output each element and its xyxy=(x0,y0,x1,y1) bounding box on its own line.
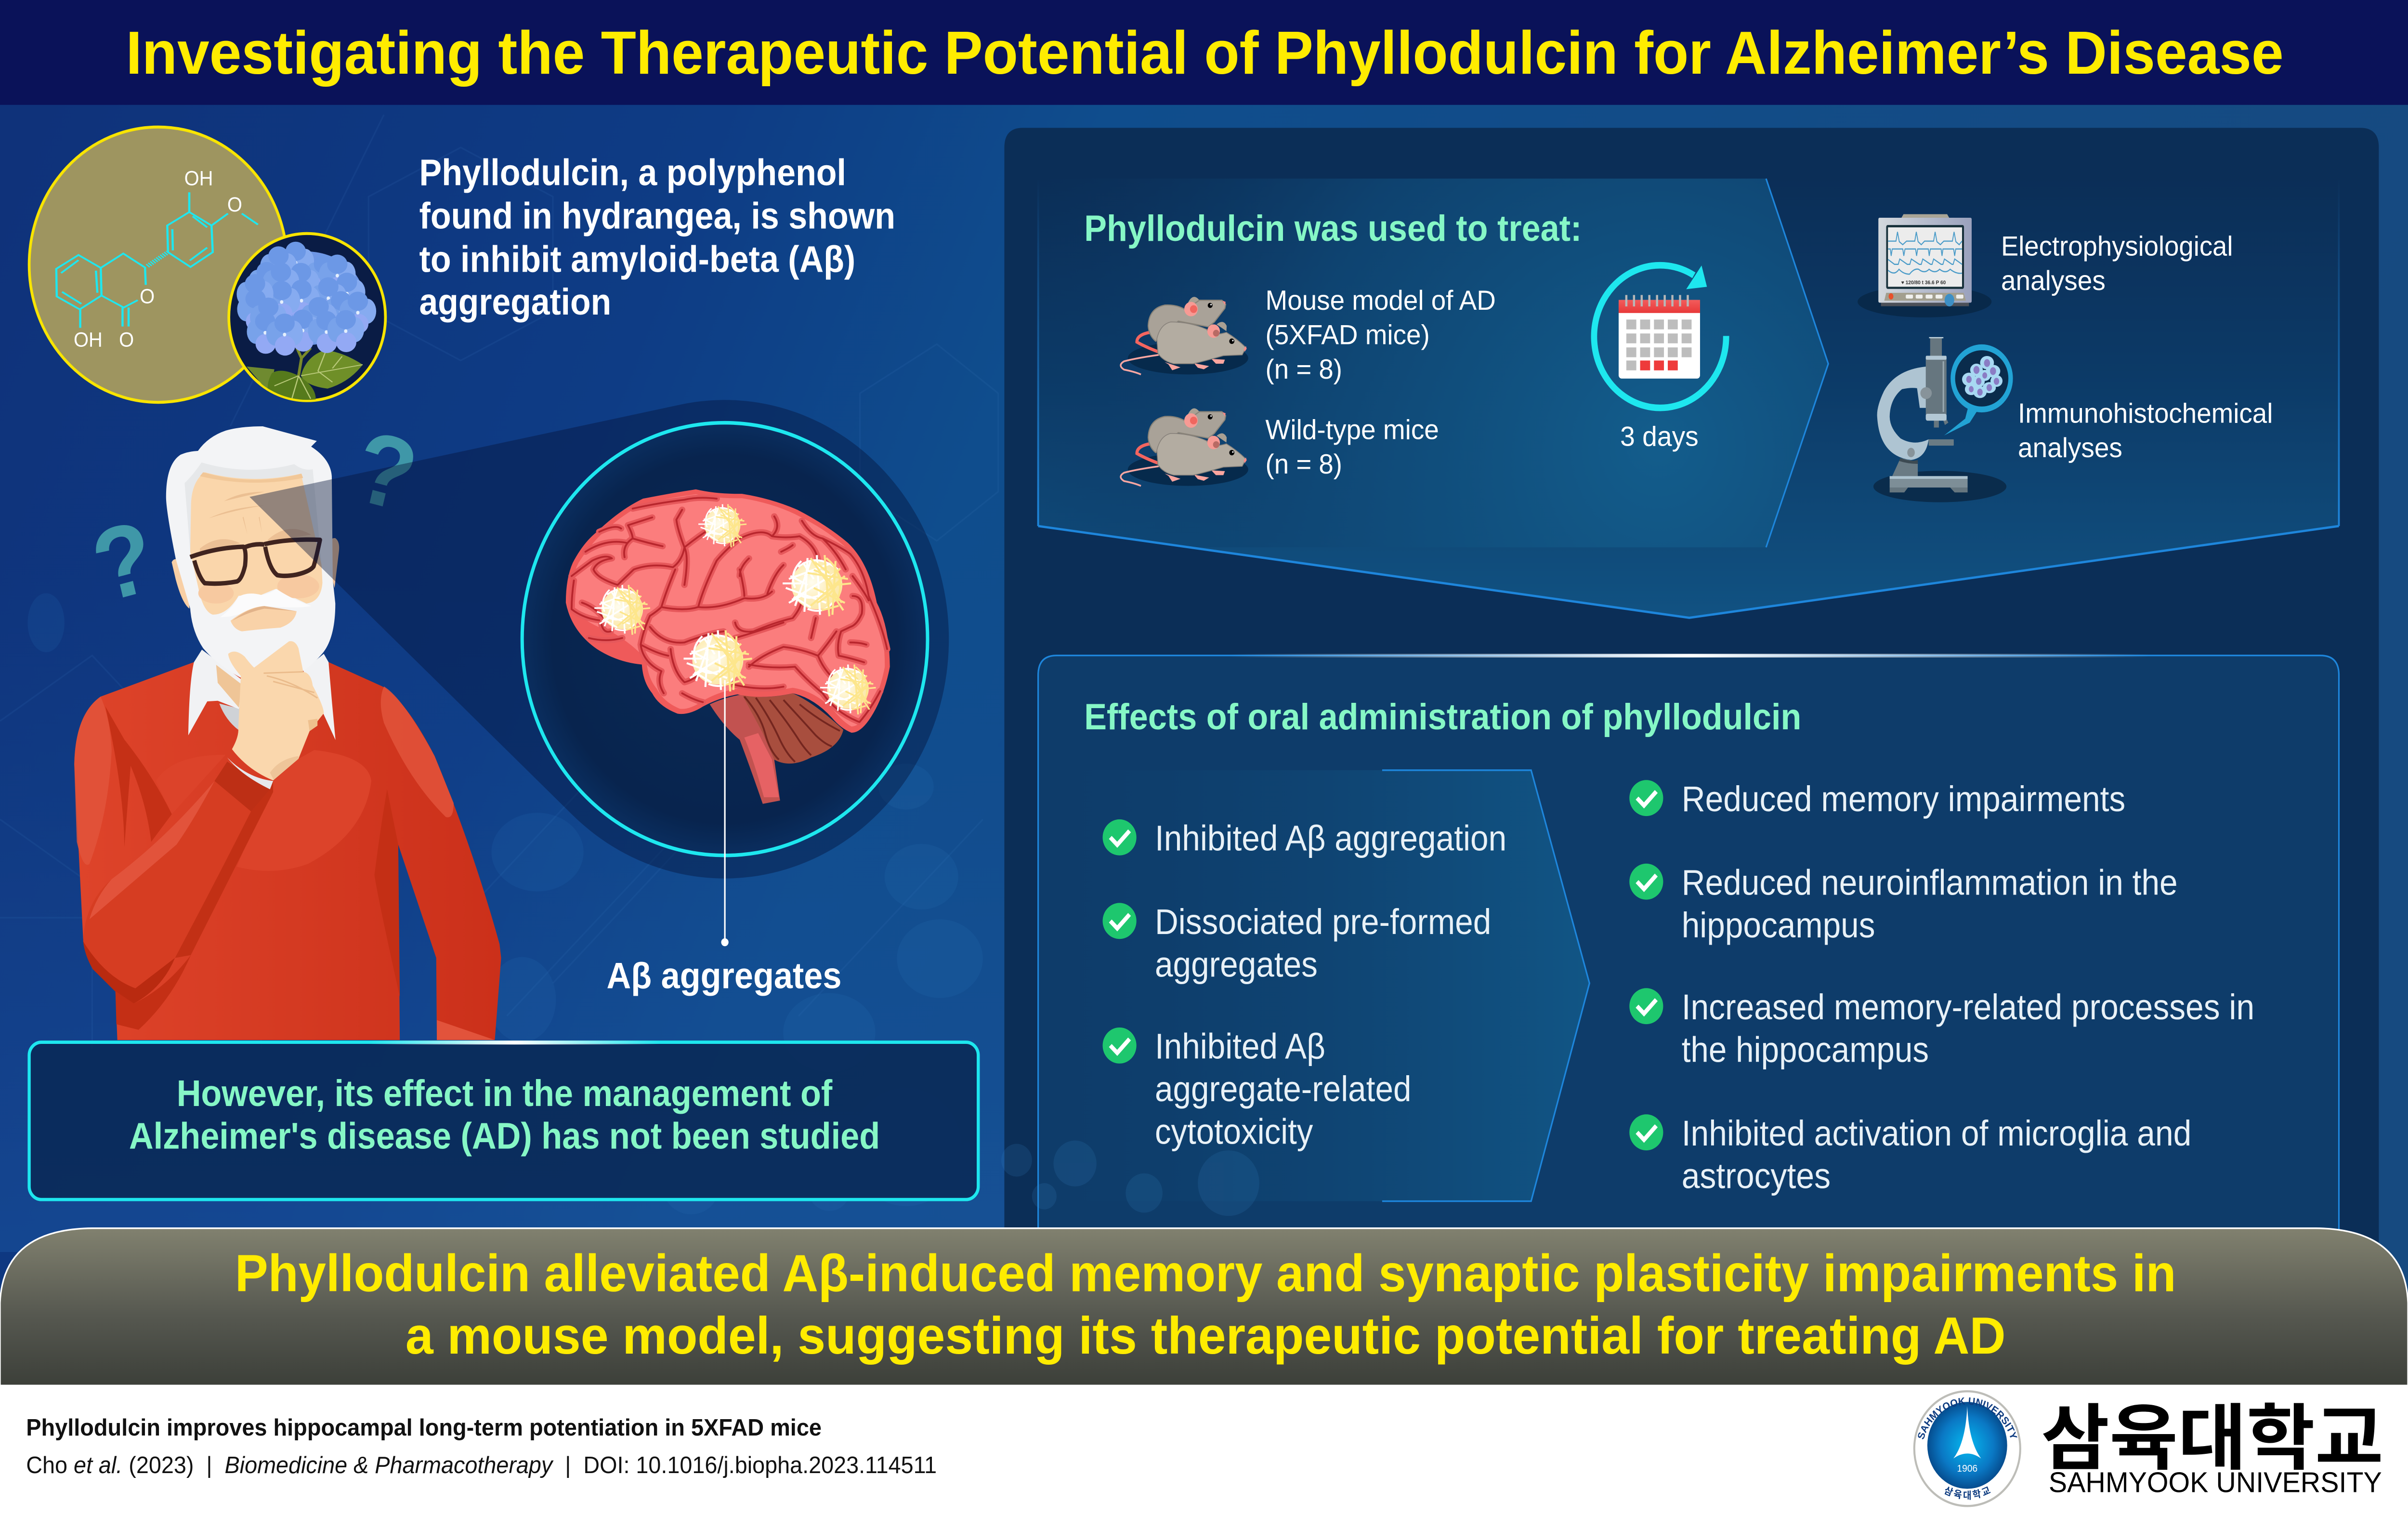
list: in vivo effects: Reduced memory impairments xyxy=(1682,779,2125,819)
head xyxy=(166,426,339,677)
plaque right xyxy=(783,555,851,616)
molecule structure xyxy=(56,192,258,328)
panel: effects xyxy=(1001,654,2339,1245)
list: in vitro effects xyxy=(1155,819,1506,1152)
effects arrow xyxy=(1038,770,1589,1201)
logo seal xyxy=(1913,1390,2021,1507)
list: in vitro effects: Inhibited Aβ xyxy=(1155,1027,1325,1067)
text: wild type: (n = 8) xyxy=(1266,448,1342,480)
flower head xyxy=(284,251,359,345)
monitor readout: ♥ 120/80 t 36.6 P 60 xyxy=(1901,280,1946,286)
cerebrum xyxy=(566,489,890,733)
university name: SAHMYOOK UNIVERSITY xyxy=(2049,1467,2382,1499)
intro text: to inhibit amyloid-beta (Aβ) xyxy=(419,238,855,280)
panel: right dark panel xyxy=(1001,128,2379,1245)
glasses xyxy=(190,540,320,584)
question mark right: ? xyxy=(345,409,427,534)
citation xyxy=(26,1415,937,1479)
logo seal: 삼육대학교 xyxy=(1945,1487,1991,1500)
sulci halo xyxy=(572,498,887,722)
callout bubble with cells xyxy=(1944,347,2011,435)
list: in vivo effects: hippocampus xyxy=(1682,906,1875,945)
list: in vitro effects: aggregates xyxy=(1155,945,1318,985)
list: in vitro effects: aggregate-related xyxy=(1155,1069,1411,1109)
text: 3 days: 3 days xyxy=(1620,421,1699,452)
icon: calendar with cycle arrow xyxy=(1594,265,1726,408)
plaque lower right xyxy=(820,665,876,714)
list: in vitro effects: Inhibited Aβ aggregation xyxy=(1155,819,1506,858)
callout: However xyxy=(29,1041,978,1199)
molecule circle xyxy=(29,127,287,402)
heading: Effects of oral administration of phyllodulcin xyxy=(1084,696,1801,737)
intro text: aggregation xyxy=(419,281,611,323)
conclusion band: Phyllodulcin alleviated Aβ-induced memory and synaptic plasticity impairments in xyxy=(235,1244,2176,1303)
list: in vitro effects: cytotoxicity xyxy=(1155,1112,1313,1152)
text: mouse model xyxy=(1266,284,1496,384)
callout: However: However, its effect in the management of xyxy=(177,1072,833,1114)
logo seal: SAHMYOOK UNIVERSITY xyxy=(1918,1397,2017,1439)
list: in vivo effects: Reduced neuroinflammation in the xyxy=(1682,863,2178,903)
plaque center xyxy=(684,630,752,691)
title bar xyxy=(0,0,2408,105)
icon: microscope xyxy=(1873,337,2011,502)
text: immunohistochemical xyxy=(2018,397,2273,463)
text: electrophysiological: analyses xyxy=(2001,265,2106,296)
cerebellum xyxy=(742,693,843,764)
citation: Cho et al. (2023) | Biomedicine & Pharmacotherapy | DOI: 10.1016/j.biopha.2023.114511 xyxy=(26,1452,937,1479)
hair and beard xyxy=(166,426,335,677)
icon: mice wild type xyxy=(1121,408,1248,486)
right ear xyxy=(328,538,339,588)
text: wild type xyxy=(1266,414,1439,480)
brain stem xyxy=(710,695,780,804)
beam xyxy=(249,400,949,879)
panel: man and brain xyxy=(74,400,949,1040)
plaque left xyxy=(594,585,650,635)
list: in vivo effects xyxy=(1682,779,2254,1196)
pointer line xyxy=(724,680,725,942)
moustache xyxy=(220,589,311,617)
citation: Phyllodulcin improves hippocampal long-term potentiation in 5XFAD mice xyxy=(26,1415,822,1441)
footer xyxy=(0,1380,2408,1515)
list: in vivo effects: astrocytes xyxy=(1682,1156,1831,1196)
bokeh cells xyxy=(1001,1141,1259,1216)
list: in vivo effects: the hippocampus xyxy=(1682,1030,1929,1070)
university name: 삼육대학교 xyxy=(2041,1380,2383,1484)
text: wild type: Wild-type mice xyxy=(1266,414,1439,445)
atom labels xyxy=(74,167,242,351)
list: in vivo effects: Inhibited activation of microglia and xyxy=(1682,1114,2191,1153)
label: Aβ aggregates: Aβ aggregates xyxy=(607,955,841,996)
text: mouse model: (n = 8) xyxy=(1266,353,1342,384)
text: immunohistochemical: Immunohistochemical xyxy=(2018,397,2273,429)
check icons xyxy=(1103,780,1663,1150)
heading: Phyllodulcin was used to treat: xyxy=(1084,208,1582,249)
leaves and stem xyxy=(296,346,311,376)
atom labels: OH xyxy=(184,167,213,190)
text: mouse model: (5XFAD mice) xyxy=(1266,319,1430,350)
sulci core xyxy=(572,498,887,722)
atom labels: O xyxy=(140,285,155,308)
list: in vitro effects: Dissociated pre-formed xyxy=(1155,902,1491,942)
text: electrophysiological xyxy=(2001,230,2233,296)
atom labels: O xyxy=(227,193,242,216)
atom labels: O xyxy=(119,328,134,351)
sweater xyxy=(74,650,501,1040)
face xyxy=(190,472,323,615)
intro text xyxy=(419,151,895,323)
atom labels: OH xyxy=(74,328,103,351)
panel: study design pentagon xyxy=(1038,177,2339,618)
conclusion band xyxy=(0,1228,2408,1386)
text: mouse model: Mouse model of AD xyxy=(1266,284,1496,316)
hydrangea circle xyxy=(229,234,385,402)
lens circle xyxy=(522,423,928,856)
icon: monitor xyxy=(1858,214,1991,317)
intro text: found in hydrangea, is shown xyxy=(419,195,895,237)
left ear xyxy=(172,559,189,609)
callout: However: Alzheimer's disease (AD) has not been studied xyxy=(129,1115,880,1157)
intro text: Phyllodulcin, a polyphenol xyxy=(419,151,846,193)
mouth xyxy=(231,606,297,632)
text: immunohistochemical: analyses xyxy=(2018,432,2122,463)
list: in vivo effects: Increased memory-related processes in xyxy=(1682,988,2254,1027)
plaque top xyxy=(698,504,746,547)
brain xyxy=(566,489,890,804)
text: electrophysiological: Electrophysiological xyxy=(2001,230,2233,262)
question mark left: ? xyxy=(82,499,165,624)
logo seal: 1906 xyxy=(1957,1463,1977,1474)
hand xyxy=(227,641,324,789)
icon: mice AD xyxy=(1121,297,1248,374)
conclusion band: a mouse model, suggesting its therapeutic potential for treating AD xyxy=(406,1306,2006,1365)
title: Investigating the Therapeutic Potential of Phyllodulcin for Alzheimer’s Disease xyxy=(126,19,2284,87)
